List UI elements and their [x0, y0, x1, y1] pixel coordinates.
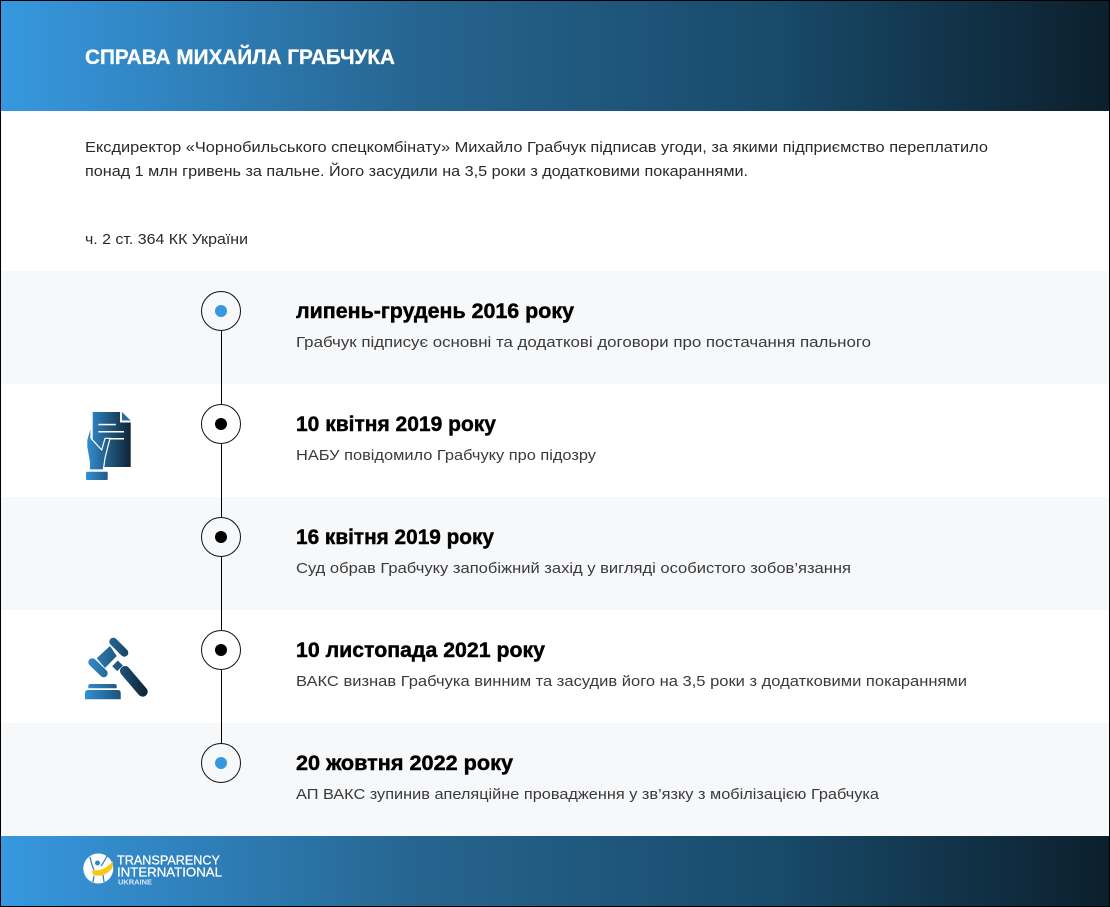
timeline event 5: 20 жовтня 2022 року — [296, 752, 513, 775]
logo: Transparency International Ukraine: TRANSPARENCY — [117, 852, 220, 868]
header band — [1, 1, 1109, 111]
timeline event 5 — [202, 744, 880, 803]
timeline event 3: 16 квітня 2019 року — [296, 526, 494, 549]
timeline event 5: АП ВАКС зупинив апеляційне провадження у зв’язку з мобілізацією Грабчука — [296, 786, 880, 803]
title: СПРАВА МИХАЙЛА ГРАБЧУКА — [85, 45, 395, 69]
icon: hand holding document — [86, 412, 131, 480]
timeline event 3 — [202, 518, 851, 577]
timeline event 4 — [202, 630, 967, 690]
timeline event 3: Суд обрав Грабчуку запобіжний захід у вигляді особистого зобов’язання — [296, 560, 851, 577]
timeline event 2: НАБУ повідомило Грабчуку про підозру — [296, 447, 597, 464]
timeline event 1: Грабчук підписує основні та додаткові договори про постачання пального — [296, 334, 871, 351]
icon: gavel — [85, 642, 143, 699]
footer band — [1, 836, 1109, 906]
intro text — [85, 139, 988, 180]
timeline event 1 — [202, 292, 871, 351]
timeline event 1: липень-грудень 2016 року — [296, 300, 574, 323]
logo: Transparency International Ukraine: INTERNATIONAL — [117, 864, 222, 880]
timeline line — [221, 311, 222, 763]
legal article reference: ч. 2 ст. 364 КК України — [85, 231, 248, 248]
timeline event 4: ВАКС визнав Грабчука винним та засудив його на 3,5 роки з додатковими покараннями — [296, 673, 967, 690]
row backgrounds — [1, 271, 1109, 836]
logo: Transparency International Ukraine — [83, 852, 222, 886]
timeline event 2 — [202, 404, 597, 464]
timeline event 4: 10 листопада 2021 року — [296, 639, 545, 662]
timeline event 2: 10 квітня 2019 року — [296, 413, 496, 436]
logo: Transparency International Ukraine: UKRAINE — [118, 880, 152, 886]
intro text: Ексдиректор «Чорнобильського спецкомбінату» Михайло Грабчук підписав угоди, за якими підприємство переплатило — [85, 139, 988, 156]
intro text: понад 1 млн гривень за пальне. Його засудили на 3,5 роки з додатковими покараннями. — [85, 162, 748, 180]
